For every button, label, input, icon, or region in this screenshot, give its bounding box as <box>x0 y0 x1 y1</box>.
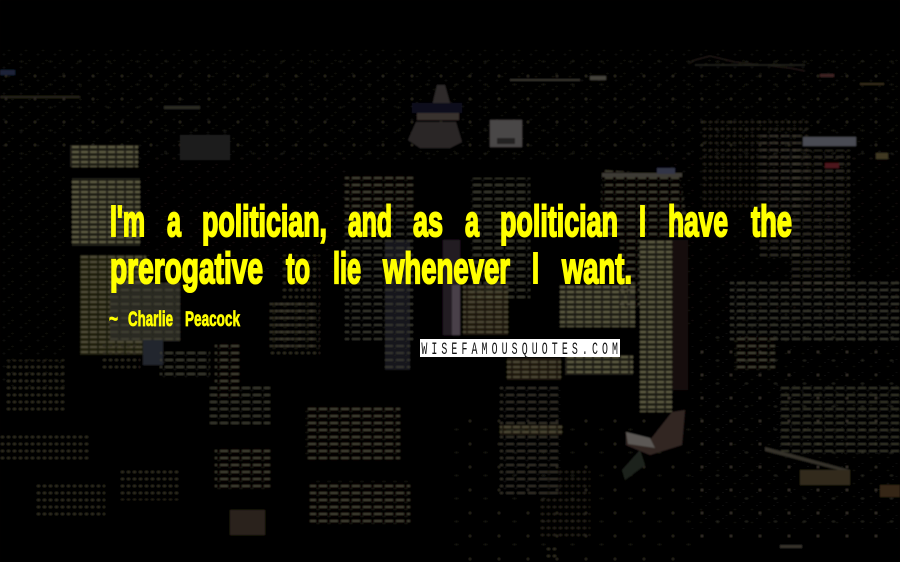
watermark badge: WISEFAMOUSQUOTES.COM <box>421 340 618 360</box>
line 1: a <box>465 197 479 246</box>
line 1: a <box>167 197 181 246</box>
line 1: I'm <box>110 197 145 246</box>
author attribution: Charlie <box>128 308 173 331</box>
author attribution: Peacock <box>185 308 240 331</box>
line 2: prerogative <box>110 244 263 293</box>
line 2: whenever <box>382 244 510 293</box>
line 1: as <box>413 197 443 246</box>
dim lower centre lights <box>540 470 802 557</box>
line 1: the <box>751 197 792 246</box>
line 2: I <box>532 244 539 293</box>
quote text <box>110 197 792 293</box>
right office blocks <box>730 280 900 497</box>
bright tower left <box>70 145 180 365</box>
pale rooftop with red glow <box>622 410 685 480</box>
line 1: politician <box>500 197 618 246</box>
mid-right towers <box>463 120 888 495</box>
line 2: want. <box>561 244 632 293</box>
line 2: lie <box>333 244 361 293</box>
line 1: I <box>639 197 646 246</box>
white-topped building <box>490 120 522 147</box>
line 1 <box>110 197 792 246</box>
hazy building block <box>180 135 230 160</box>
line 1: and <box>348 197 392 246</box>
author attribution: ~ <box>109 308 118 331</box>
lower-left blocks <box>0 300 410 535</box>
mid-left towers <box>270 175 460 370</box>
line 2: to <box>286 244 310 293</box>
dome skyscraper <box>408 85 462 148</box>
author attribution <box>109 308 240 331</box>
line 2 <box>110 244 632 293</box>
line 1: politician, <box>202 197 327 246</box>
line 1: have <box>668 197 728 246</box>
